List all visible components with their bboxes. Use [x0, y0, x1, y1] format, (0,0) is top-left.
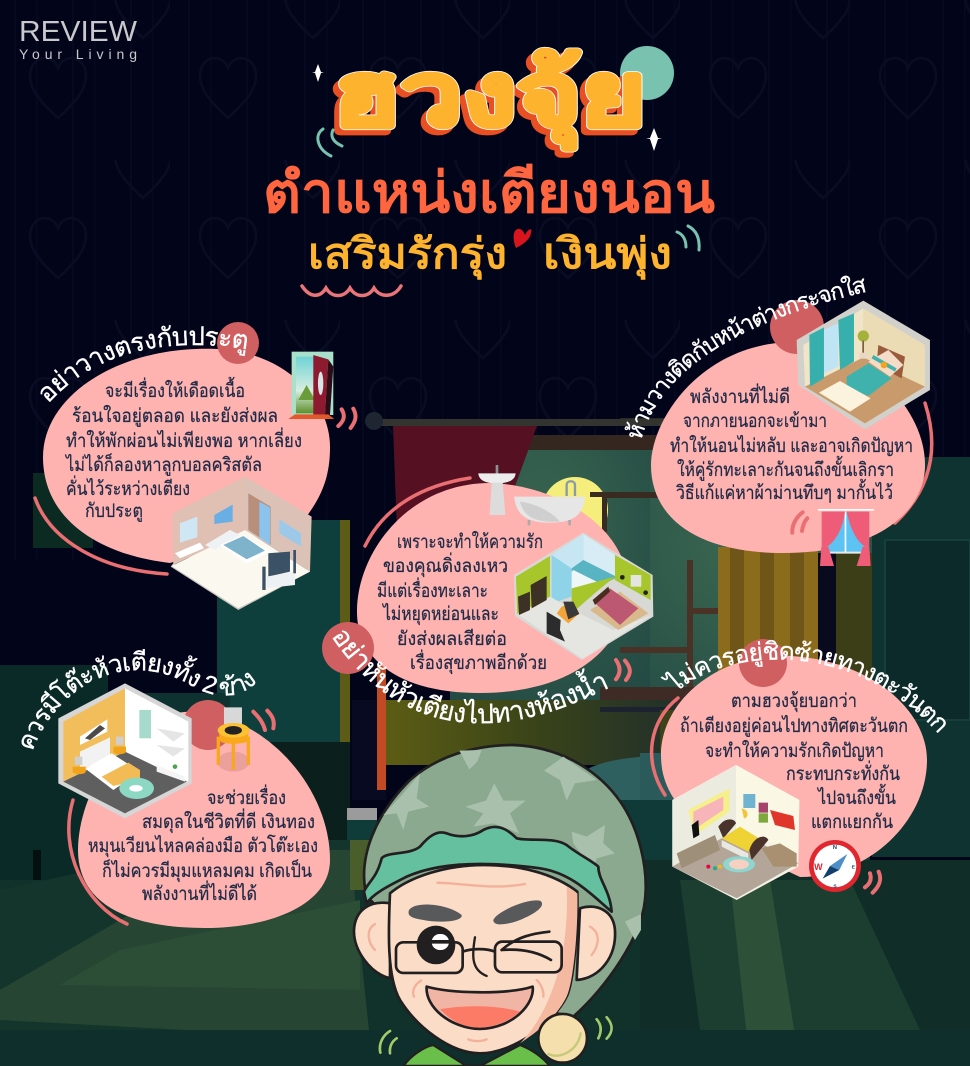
- icon: bedside table with lamp: [217, 707, 250, 772]
- body text: [670, 383, 913, 504]
- sound marks: [616, 660, 630, 680]
- body text: ยังส่งผลเสียต่อ: [397, 628, 507, 650]
- floor: [0, 840, 970, 1066]
- icon: compass: [809, 840, 861, 892]
- icon: compass: W: [814, 862, 823, 872]
- body text: ไปจนถึงขั้น: [816, 784, 896, 809]
- main title: ฮวงจุ้ย: [333, 45, 646, 150]
- nose: [473, 937, 487, 976]
- pink blob: [43, 349, 330, 563]
- left wardrobe: [33, 473, 350, 842]
- icon: compass: E: [852, 865, 856, 871]
- panel: not close to the west: [650, 639, 946, 900]
- shirt: [403, 1045, 550, 1066]
- glasses: [396, 942, 562, 973]
- body text: ไม่ได้ก็ลองหาลูกบอลคริสตัล: [64, 452, 262, 476]
- heart: [514, 229, 531, 248]
- bed: [580, 753, 870, 890]
- curved heading: ห้ามวางติดกับหน้าต่างกระจกใส: [624, 276, 866, 438]
- hair band: [364, 827, 612, 912]
- panel: do not face the door: [33, 322, 358, 610]
- illustration: yellow bedroom: [58, 683, 192, 818]
- body text: [680, 691, 908, 833]
- body text: จากภายนอกจะเข้ามา: [683, 411, 827, 432]
- body text: เพราะจะทำให้ความรัก: [397, 531, 543, 553]
- body text: มีแต่เรื่องทะเลาะ: [377, 577, 488, 602]
- gold curtain: [718, 547, 818, 700]
- main title: ฮวงจุ้ย: [333, 45, 646, 150]
- wavy underline: [302, 286, 401, 296]
- cheek lines: [413, 980, 543, 1041]
- body text: ถ้าเตียงอยู่ค่อนไปทางทิศตะวันตก: [680, 715, 908, 737]
- curtain rod: [365, 412, 668, 430]
- body text: จะมีเรื่องให้เดือดเนื้อ: [105, 377, 245, 402]
- subtitle line 2 right: เงินพุ่ง: [543, 230, 672, 280]
- icon: door: [288, 352, 334, 419]
- body text: ร้อนใจอยู่ตลอด และยังส่งผล: [72, 405, 278, 427]
- lower wall band: [600, 687, 770, 707]
- pink blob: [651, 342, 925, 553]
- winking eye: [502, 932, 551, 960]
- body text: ไม่หยุดหย่อนและ: [381, 603, 499, 626]
- face: [389, 865, 577, 1053]
- panel: bathroom direction: [322, 465, 654, 724]
- logo: Your Living: [19, 46, 137, 62]
- coral arc: [69, 800, 127, 924]
- sparkles: [312, 64, 662, 151]
- red circle: [217, 322, 259, 364]
- body text: [377, 531, 547, 675]
- illustration: bathroom bedroom: [514, 533, 653, 660]
- red circle: [322, 622, 374, 674]
- sound marks: [253, 711, 274, 730]
- sound marks: [338, 409, 356, 428]
- sound marks: [865, 872, 880, 893]
- coral arc: [895, 403, 932, 523]
- logo: [19, 16, 138, 62]
- red curtain: [393, 426, 537, 560]
- title: [263, 45, 715, 296]
- body text: สมดุลในชีวิตที่ดี เงินทอง: [142, 808, 315, 834]
- icon: curtain window: [818, 509, 874, 566]
- red circle: [739, 639, 787, 687]
- body text: คั่นไว้ระหว่างเตียง: [66, 475, 190, 500]
- eye: [417, 926, 455, 964]
- body text: พลังงานที่ไม่ดี: [690, 383, 790, 408]
- coral arc: [365, 478, 470, 546]
- curved heading: ไม่ควรอยู่ชิดซ้ายทางตะวันตก: [660, 640, 946, 733]
- illustration: teal bedroom: [797, 301, 930, 429]
- coral arc: [35, 498, 167, 574]
- eyebrows: [409, 900, 542, 924]
- hat stars: [383, 750, 641, 940]
- illustrations: sink and bathtub: [478, 465, 585, 525]
- body text: หมุนเวียนไหลคล่องมือ ตัวโต๊ะเอง: [88, 834, 318, 858]
- subtitle line 1: ตำแหน่งเตียงนอน: [263, 161, 715, 224]
- curved heading: อย่าหันหัวเตียงไปทางห้องน้ำ: [332, 630, 608, 724]
- logo: REVIEW: [19, 16, 138, 48]
- coral arc: [652, 698, 678, 795]
- body text: ทำให้นอนไม่หลับ และอาจเกิดปัญหา: [670, 435, 913, 457]
- body text: ให้คู่รักทะเลาะกันจนถึงขั้นเลิกรา: [677, 456, 894, 481]
- body text: ตามฮวงจุ้ยบอกว่า: [731, 691, 857, 713]
- subtitle line 2 left: เสริมรักรุ่ง: [308, 230, 507, 280]
- panel: two bedside tables: [22, 649, 330, 928]
- pink blob: [661, 656, 927, 877]
- panel: not next to glass window: [624, 276, 934, 566]
- red circle: [770, 300, 824, 354]
- forehead line: [437, 883, 525, 886]
- armchair: [0, 665, 230, 890]
- body text: จะช่วยเรื่อง: [207, 784, 286, 809]
- right wardrobe: [872, 457, 970, 857]
- sound marks: [792, 512, 807, 533]
- teal circle accent: [620, 46, 674, 100]
- body text: แตกแยกกัน: [811, 812, 893, 833]
- mouth: [427, 987, 533, 1029]
- curved heading: ควรมีโต๊ะหัวเตียงทั้ง 2 ข้าง: [22, 649, 256, 750]
- green swishes: [380, 1017, 612, 1053]
- body text: จะทำให้ความรักเกิดปัญหา: [705, 740, 884, 762]
- main title: ฮวงจุ้ย: [328, 50, 641, 155]
- body text: พลังงานที่ไม่ดีได้: [142, 880, 257, 905]
- illustration: kids bedroom: [672, 765, 799, 900]
- body text: ก็ไม่ควรมีมุมแหลมคม เกิดเป็น: [102, 858, 312, 883]
- ears: [354, 903, 615, 980]
- illustration: bedroom: [171, 477, 312, 610]
- character: man in hat: [354, 745, 646, 1066]
- moon: [542, 477, 608, 543]
- hat: [364, 745, 646, 1017]
- body text: ทำให้พักผ่อนไม่เพียงพอ หากเลี่ยง: [66, 427, 302, 452]
- body text: ของคุณดิ่งลงเหว: [383, 552, 508, 578]
- bun: [538, 1014, 587, 1063]
- curved heading: อย่าวางตรงกับประตู: [40, 325, 247, 402]
- body text: กระทบกระทั่งกัน: [786, 760, 900, 785]
- icon: compass: N: [833, 845, 837, 851]
- body text: [88, 784, 318, 905]
- body text: วิธีแก้แค่หาผ้าม่านทึบๆ มากั้นไว้: [676, 479, 893, 504]
- teal swishes: [318, 129, 699, 250]
- body text: เรื่องสุขภาพอีกด้วย: [410, 649, 547, 675]
- body text: [64, 377, 302, 522]
- pink blob: [78, 712, 330, 928]
- body text: กับประตู: [85, 501, 143, 522]
- pink blob: [357, 483, 628, 693]
- icon: compass: S: [833, 883, 837, 889]
- red circle: [183, 700, 233, 750]
